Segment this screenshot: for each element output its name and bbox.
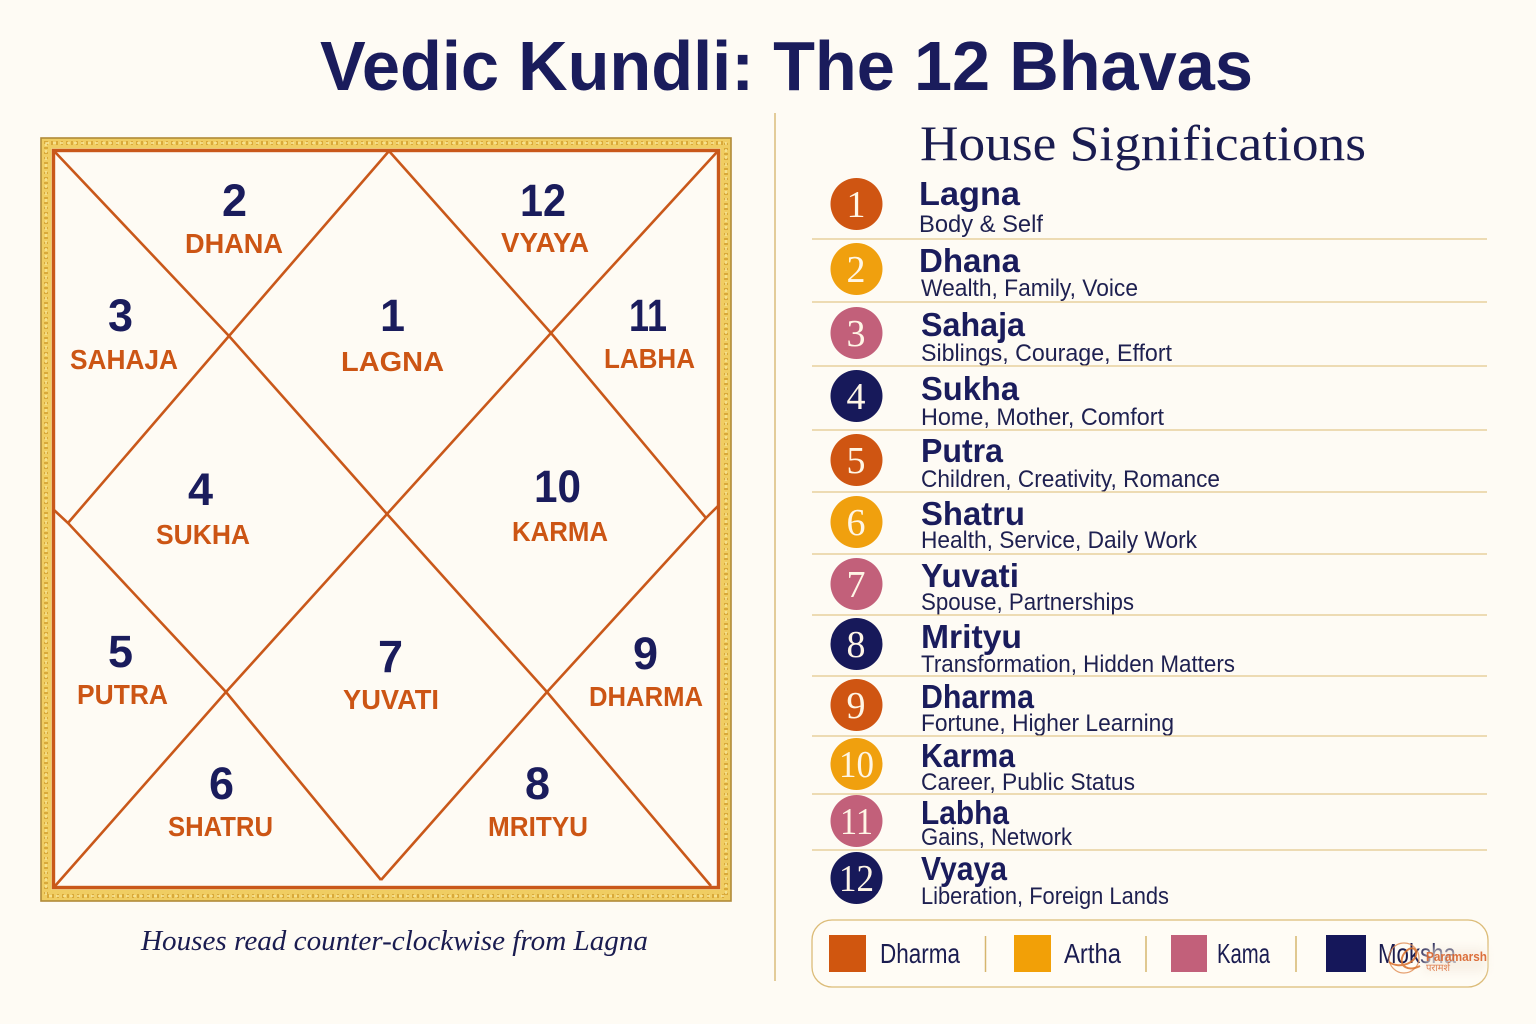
house 5: PUTRA <box>77 679 168 710</box>
house row 11: Labha <box>921 794 1010 831</box>
house 1 <box>341 290 444 377</box>
house row 12: Vyaya <box>921 850 1008 887</box>
house 12 <box>501 175 589 258</box>
house row 9: Dharma <box>921 678 1035 715</box>
legend: kama <box>1171 935 1270 972</box>
house row 6: Health, Service, Daily Work <box>921 527 1198 554</box>
house row 7: 7 <box>846 564 866 606</box>
house row 3: 3 <box>846 313 866 355</box>
chart diagonal and diamond lines <box>54 151 718 886</box>
house row 4 <box>812 370 1487 431</box>
house 11: LABHA <box>604 343 695 374</box>
house row 7 <box>812 557 1487 616</box>
house row 10 <box>812 737 1487 796</box>
house 7: YUVATI <box>343 684 439 715</box>
legend: dharma <box>829 935 960 972</box>
house row 3 <box>812 306 1487 367</box>
house row 2: Dhana <box>919 242 1021 279</box>
house row 12: Liberation, Foreign Lands <box>921 883 1169 910</box>
house 3 <box>70 290 178 375</box>
house row 5 <box>812 432 1487 493</box>
house row 5: Children, Creativity, Romance <box>921 466 1220 493</box>
house row 1: Body & Self <box>919 211 1043 238</box>
vertical divider <box>774 113 776 981</box>
house 6: 6 <box>209 758 234 809</box>
house 5: 5 <box>108 626 133 677</box>
house row 8: Transformation, Hidden Matters <box>921 651 1235 678</box>
panel: kundli chart <box>41 138 731 901</box>
heading: house significations: House Significations <box>920 115 1366 171</box>
house 11: 11 <box>629 290 667 341</box>
house row 6 <box>812 495 1487 554</box>
watermark logo: Paramarsh <box>1426 949 1487 964</box>
house row 8 <box>812 618 1487 678</box>
house 10: KARMA <box>512 516 608 547</box>
house row 3: Sahaja <box>921 306 1026 343</box>
house row 11: Gains, Network <box>921 824 1073 851</box>
watermark logo: परामर्श <box>1426 962 1451 974</box>
legend: artha <box>1014 935 1121 972</box>
house row 8: 8 <box>846 624 866 666</box>
house row 4: 4 <box>846 376 866 418</box>
house 7: 7 <box>378 631 403 682</box>
house 4: SUKHA <box>156 519 250 550</box>
house 12: VYAYA <box>501 227 589 258</box>
caption: Houses read counter-clockwise from Lagna <box>140 925 648 957</box>
house 6 <box>168 758 273 842</box>
house row 11 <box>812 794 1487 851</box>
house row 4: Sukha <box>921 370 1020 407</box>
house row 12 <box>830 850 1169 910</box>
house row 3: Siblings, Courage, Effort <box>921 340 1172 367</box>
house row 9: 9 <box>846 685 866 727</box>
panel: house list <box>812 175 1487 910</box>
house row 2: Wealth, Family, Voice <box>921 275 1138 302</box>
house 8 <box>488 758 588 842</box>
house row 7: Spouse, Partnerships <box>921 589 1134 616</box>
house 2: DHANA <box>185 228 283 259</box>
house 4: 4 <box>188 464 213 515</box>
house row 2: 2 <box>846 249 866 291</box>
house 2: 2 <box>222 175 247 226</box>
house row 5: 5 <box>846 440 866 482</box>
legend: artha: Artha <box>1064 938 1121 969</box>
house row 6: 6 <box>846 502 866 544</box>
house 2 <box>185 175 283 259</box>
house row 1: 1 <box>846 184 866 226</box>
legend: moksha <box>1326 935 1456 972</box>
house row 10: Karma <box>921 737 1016 774</box>
house 5 <box>77 626 168 710</box>
watermark logo <box>1389 943 1487 974</box>
house 7 <box>343 631 439 715</box>
legend: kama: Kama <box>1217 938 1270 969</box>
house 10 <box>512 461 608 547</box>
house 12: 12 <box>520 175 566 226</box>
house row 9: Fortune, Higher Learning <box>921 710 1174 737</box>
house row 4: Home, Mother, Comfort <box>921 404 1164 431</box>
house row 7: Yuvati <box>921 557 1019 594</box>
house row 1 <box>812 175 1487 239</box>
legend: dharma: Dharma <box>880 938 960 969</box>
house row 12: 12 <box>839 858 874 900</box>
house 10: 10 <box>534 461 581 512</box>
house 3: 3 <box>108 290 133 341</box>
house 9: DHARMA <box>589 681 703 712</box>
legend: moksha: Moksha <box>1378 938 1456 969</box>
house row 8: Mrityu <box>921 618 1022 655</box>
house 8: MRITYU <box>488 811 588 842</box>
house 8: 8 <box>525 758 550 809</box>
chart gold frame <box>41 138 731 901</box>
house 9: 9 <box>633 628 658 679</box>
house row 11: 11 <box>840 801 873 843</box>
house 1: LAGNA <box>341 346 444 377</box>
house 6: SHATRU <box>168 811 273 842</box>
house row 9 <box>812 678 1487 737</box>
house 3: SAHAJA <box>70 344 178 375</box>
house row 10: Career, Public Status <box>921 769 1135 796</box>
house row 1: Lagna <box>919 175 1021 212</box>
house 4 <box>156 464 250 550</box>
house row 5: Putra <box>921 432 1004 469</box>
house 1: 1 <box>380 290 405 341</box>
legend <box>812 920 1488 987</box>
house row 2 <box>812 242 1487 302</box>
house row 10: 10 <box>839 744 874 786</box>
house 11 <box>604 290 695 374</box>
title: Vedic Kundli: The 12 Bhavas <box>320 27 1253 105</box>
house row 6: Shatru <box>921 495 1025 532</box>
house 9 <box>589 628 703 712</box>
